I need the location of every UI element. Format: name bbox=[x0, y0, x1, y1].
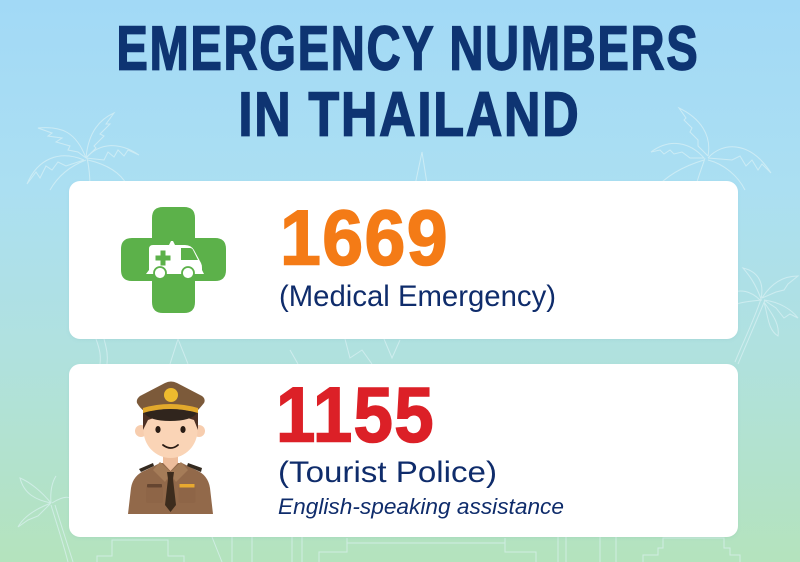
smile bbox=[163, 445, 178, 448]
cap bbox=[137, 382, 205, 411]
card background bbox=[69, 364, 738, 537]
background line art: palm trees and temples bbox=[18, 108, 798, 562]
temple fragments: between cards bbox=[96, 339, 400, 364]
icon: police officer bbox=[128, 382, 213, 514]
palm tree: top left bbox=[27, 113, 139, 200]
hair bbox=[143, 410, 198, 430]
tie bbox=[165, 472, 176, 512]
collar bbox=[153, 462, 188, 482]
icon: green cross with ambulance bbox=[121, 207, 226, 313]
ears bbox=[135, 425, 147, 437]
ambulance bbox=[146, 241, 204, 279]
number: 1155: 1155 bbox=[276, 370, 435, 458]
temple spire: top centre bbox=[414, 152, 428, 190]
epaulettes bbox=[139, 463, 154, 472]
title bbox=[116, 14, 700, 150]
note: english-speaking assistance: English-speaking assistance bbox=[278, 494, 564, 519]
label: medical emergency: (Medical Emergency) bbox=[279, 280, 556, 313]
title: IN THAILAND bbox=[238, 80, 580, 150]
uniform bbox=[128, 463, 213, 514]
palm tree: top right bbox=[651, 108, 771, 190]
palm tree: right bbox=[734, 268, 798, 364]
panel: tourist police bbox=[69, 364, 738, 537]
face bbox=[144, 402, 198, 458]
label: tourist police: (Tourist Police) bbox=[278, 456, 497, 489]
eyes bbox=[155, 426, 161, 433]
pockets bbox=[146, 486, 163, 503]
palm tree: bottom left bbox=[18, 476, 73, 562]
neck bbox=[163, 450, 178, 471]
panel: medical emergency bbox=[69, 181, 738, 339]
temple outline: bottom bbox=[97, 537, 740, 562]
number: 1669: 1669 bbox=[280, 194, 449, 282]
card background bbox=[69, 181, 738, 339]
